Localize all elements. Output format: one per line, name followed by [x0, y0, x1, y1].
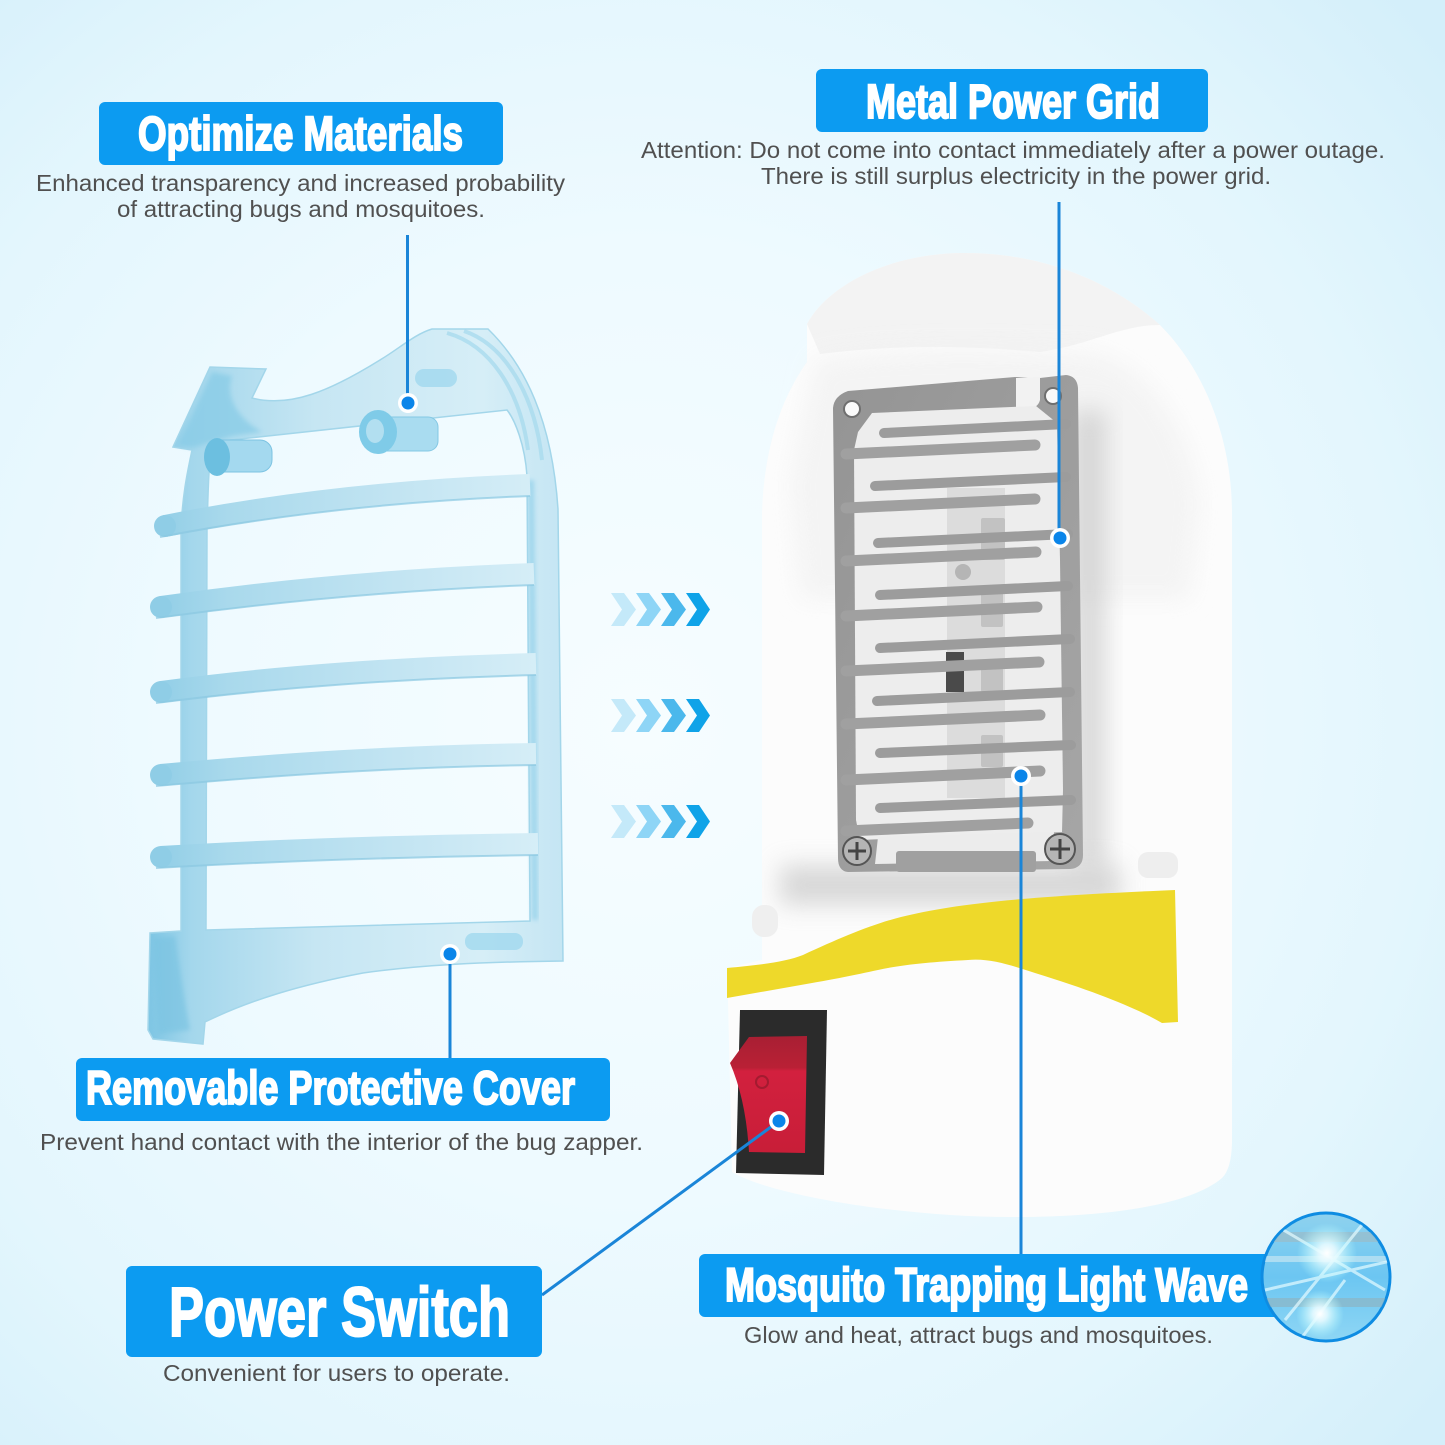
device: red rocker switch	[730, 1036, 807, 1153]
device: upper body shading	[790, 350, 1200, 600]
grid: top notch	[1016, 377, 1040, 410]
callout: optimize materials	[36, 102, 566, 222]
badge	[76, 1058, 610, 1121]
grid: circuit strip	[947, 488, 1005, 798]
device: plate shadow	[1072, 410, 1106, 870]
arrows	[611, 593, 710, 838]
grid: comb bars from the right	[875, 424, 1071, 808]
dot: metal grid	[1050, 528, 1070, 548]
description: Convenient for users to operate.	[163, 1360, 510, 1386]
grid: light emitters	[946, 518, 1005, 767]
device: left mount tab	[752, 905, 778, 937]
grid: top-left hole	[844, 401, 860, 417]
device: body	[728, 253, 1232, 1217]
leader lines	[408, 202, 1059, 1295]
callout: power switch	[126, 1266, 542, 1386]
cover: left peg	[204, 438, 272, 476]
description line 2: of attracting bugs and mosquitoes.	[117, 196, 485, 222]
badge	[126, 1266, 542, 1357]
grid: bottom slot	[875, 832, 1054, 864]
description: Glow and heat, attract bugs and mosquitoes.	[744, 1322, 1213, 1348]
cover: hook shading	[178, 372, 262, 448]
cover: upper small peg	[415, 369, 457, 387]
cover: lower small peg	[465, 933, 523, 950]
cover: horizontal bars	[161, 485, 538, 857]
device: yellow band	[727, 890, 1178, 1023]
cover: centre peg	[359, 410, 438, 454]
callout: mosquito trapping light wave	[699, 1213, 1395, 1348]
badge	[816, 69, 1208, 132]
description: Attention: Do not come into contact immediately after a power outage.	[641, 137, 1385, 163]
description: Prevent hand contact with the interior of the bug zapper.	[40, 1129, 643, 1155]
cover: frame silhouette	[148, 329, 563, 1044]
cover: bar left ends	[150, 515, 176, 868]
device: switch housing	[736, 1010, 827, 1175]
heading: Mosquito Trapping Light Wave	[725, 1258, 1248, 1311]
device: lower shadow	[780, 865, 1120, 905]
heading: Metal Power Grid	[866, 76, 1160, 129]
cover: bar undersides	[156, 496, 538, 868]
badge	[99, 102, 503, 165]
metal grid	[833, 375, 1083, 872]
cover: right frame streak	[531, 480, 535, 920]
cover: top-right ribs	[447, 331, 542, 460]
bug zapper device	[727, 253, 1232, 1217]
grid: top-right hole	[1045, 388, 1061, 404]
description: Enhanced transparency and increased probability	[36, 170, 566, 196]
light wave circle	[1262, 1213, 1395, 1341]
dot: switch	[769, 1111, 789, 1131]
grid: right screw	[1045, 834, 1075, 864]
grid: comb bars from the left	[846, 445, 1040, 831]
grid: light window	[854, 406, 1063, 840]
dot: optimize materials	[398, 393, 418, 413]
arrow row 2	[611, 699, 710, 732]
protective cover	[148, 329, 563, 1044]
description line 2: There is still surplus electricity in the power grid.	[761, 163, 1271, 189]
callout: removable protective cover	[40, 1058, 643, 1155]
heading: Removable Protective Cover	[86, 1061, 575, 1114]
callout: metal power grid	[641, 69, 1385, 189]
grid: plate	[833, 375, 1083, 872]
dot: cover	[440, 944, 460, 964]
arrow row 3	[611, 805, 710, 838]
device: top cap shading	[807, 253, 1160, 354]
heading: Optimize Materials	[138, 108, 463, 161]
cover: bottom-left shading	[153, 936, 190, 1034]
grid: left screw	[843, 837, 871, 865]
grid: bottom bar	[896, 851, 1036, 872]
device: right mount tab	[1138, 852, 1178, 878]
arrow row 1	[611, 593, 710, 626]
dot: light wave	[1011, 766, 1031, 786]
heading: Power Switch	[169, 1273, 510, 1351]
marker dots	[398, 393, 1070, 1131]
badge	[699, 1254, 1289, 1317]
